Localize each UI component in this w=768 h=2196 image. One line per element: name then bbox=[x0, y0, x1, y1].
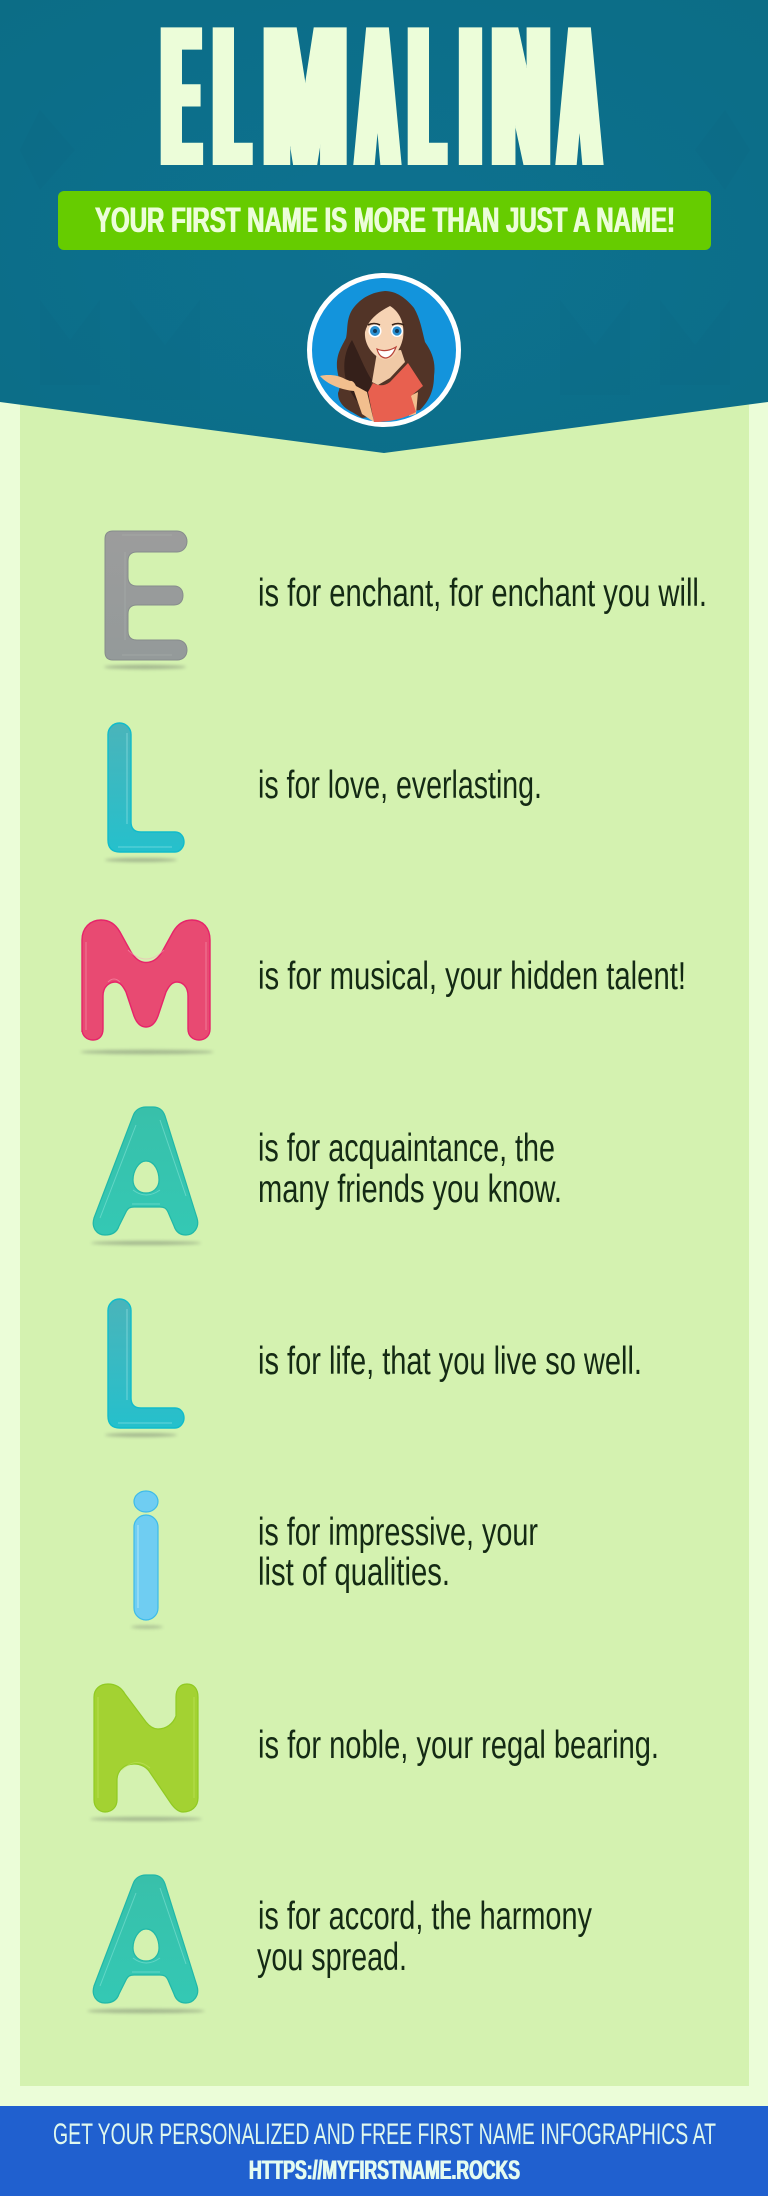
icon: avatar of woman bbox=[310, 276, 458, 424]
text: second A line: you spread. bbox=[257, 1936, 407, 1979]
letter M row bbox=[80, 920, 686, 1054]
footer url: HTTPS://MYFIRSTNAME.ROCKS bbox=[249, 2155, 520, 2185]
text: L line: is for love, everlasting. bbox=[258, 764, 542, 807]
letter A bbox=[87, 1875, 205, 2013]
text: second L line: is for life, that you live so well. bbox=[258, 1340, 642, 1383]
letter L row bbox=[105, 723, 542, 862]
letter A bbox=[91, 1107, 201, 1245]
text: A line: many friends you know. bbox=[258, 1168, 562, 1211]
letter N row bbox=[90, 1684, 659, 1821]
text: i line: list of qualities. bbox=[258, 1551, 450, 1594]
header banner bbox=[0, 0, 768, 453]
footer bbox=[0, 2106, 768, 2196]
letter i bbox=[131, 1491, 163, 1629]
text: second A line: is for accord, the harmony bbox=[258, 1895, 592, 1938]
title bbox=[164, 0, 598, 208]
subtitle bar bbox=[58, 191, 711, 250]
text: i line: is for impressive, your bbox=[258, 1511, 538, 1554]
content panel bbox=[20, 300, 749, 2086]
letter E row bbox=[104, 531, 707, 669]
second letter L row bbox=[105, 1299, 642, 1437]
text: second A line bbox=[257, 1895, 592, 1979]
letter E bbox=[104, 531, 187, 669]
letter L bbox=[105, 1299, 184, 1437]
letter N bbox=[90, 1684, 202, 1821]
letter i row bbox=[131, 1491, 538, 1629]
letter M bbox=[80, 920, 214, 1054]
letter L bbox=[105, 723, 184, 862]
text: A line bbox=[258, 1127, 562, 1211]
text: A line: is for acquaintance, the bbox=[258, 1127, 555, 1170]
letter A row bbox=[91, 1107, 562, 1245]
second letter A row bbox=[87, 1875, 592, 2013]
text: i line bbox=[258, 1511, 538, 1594]
